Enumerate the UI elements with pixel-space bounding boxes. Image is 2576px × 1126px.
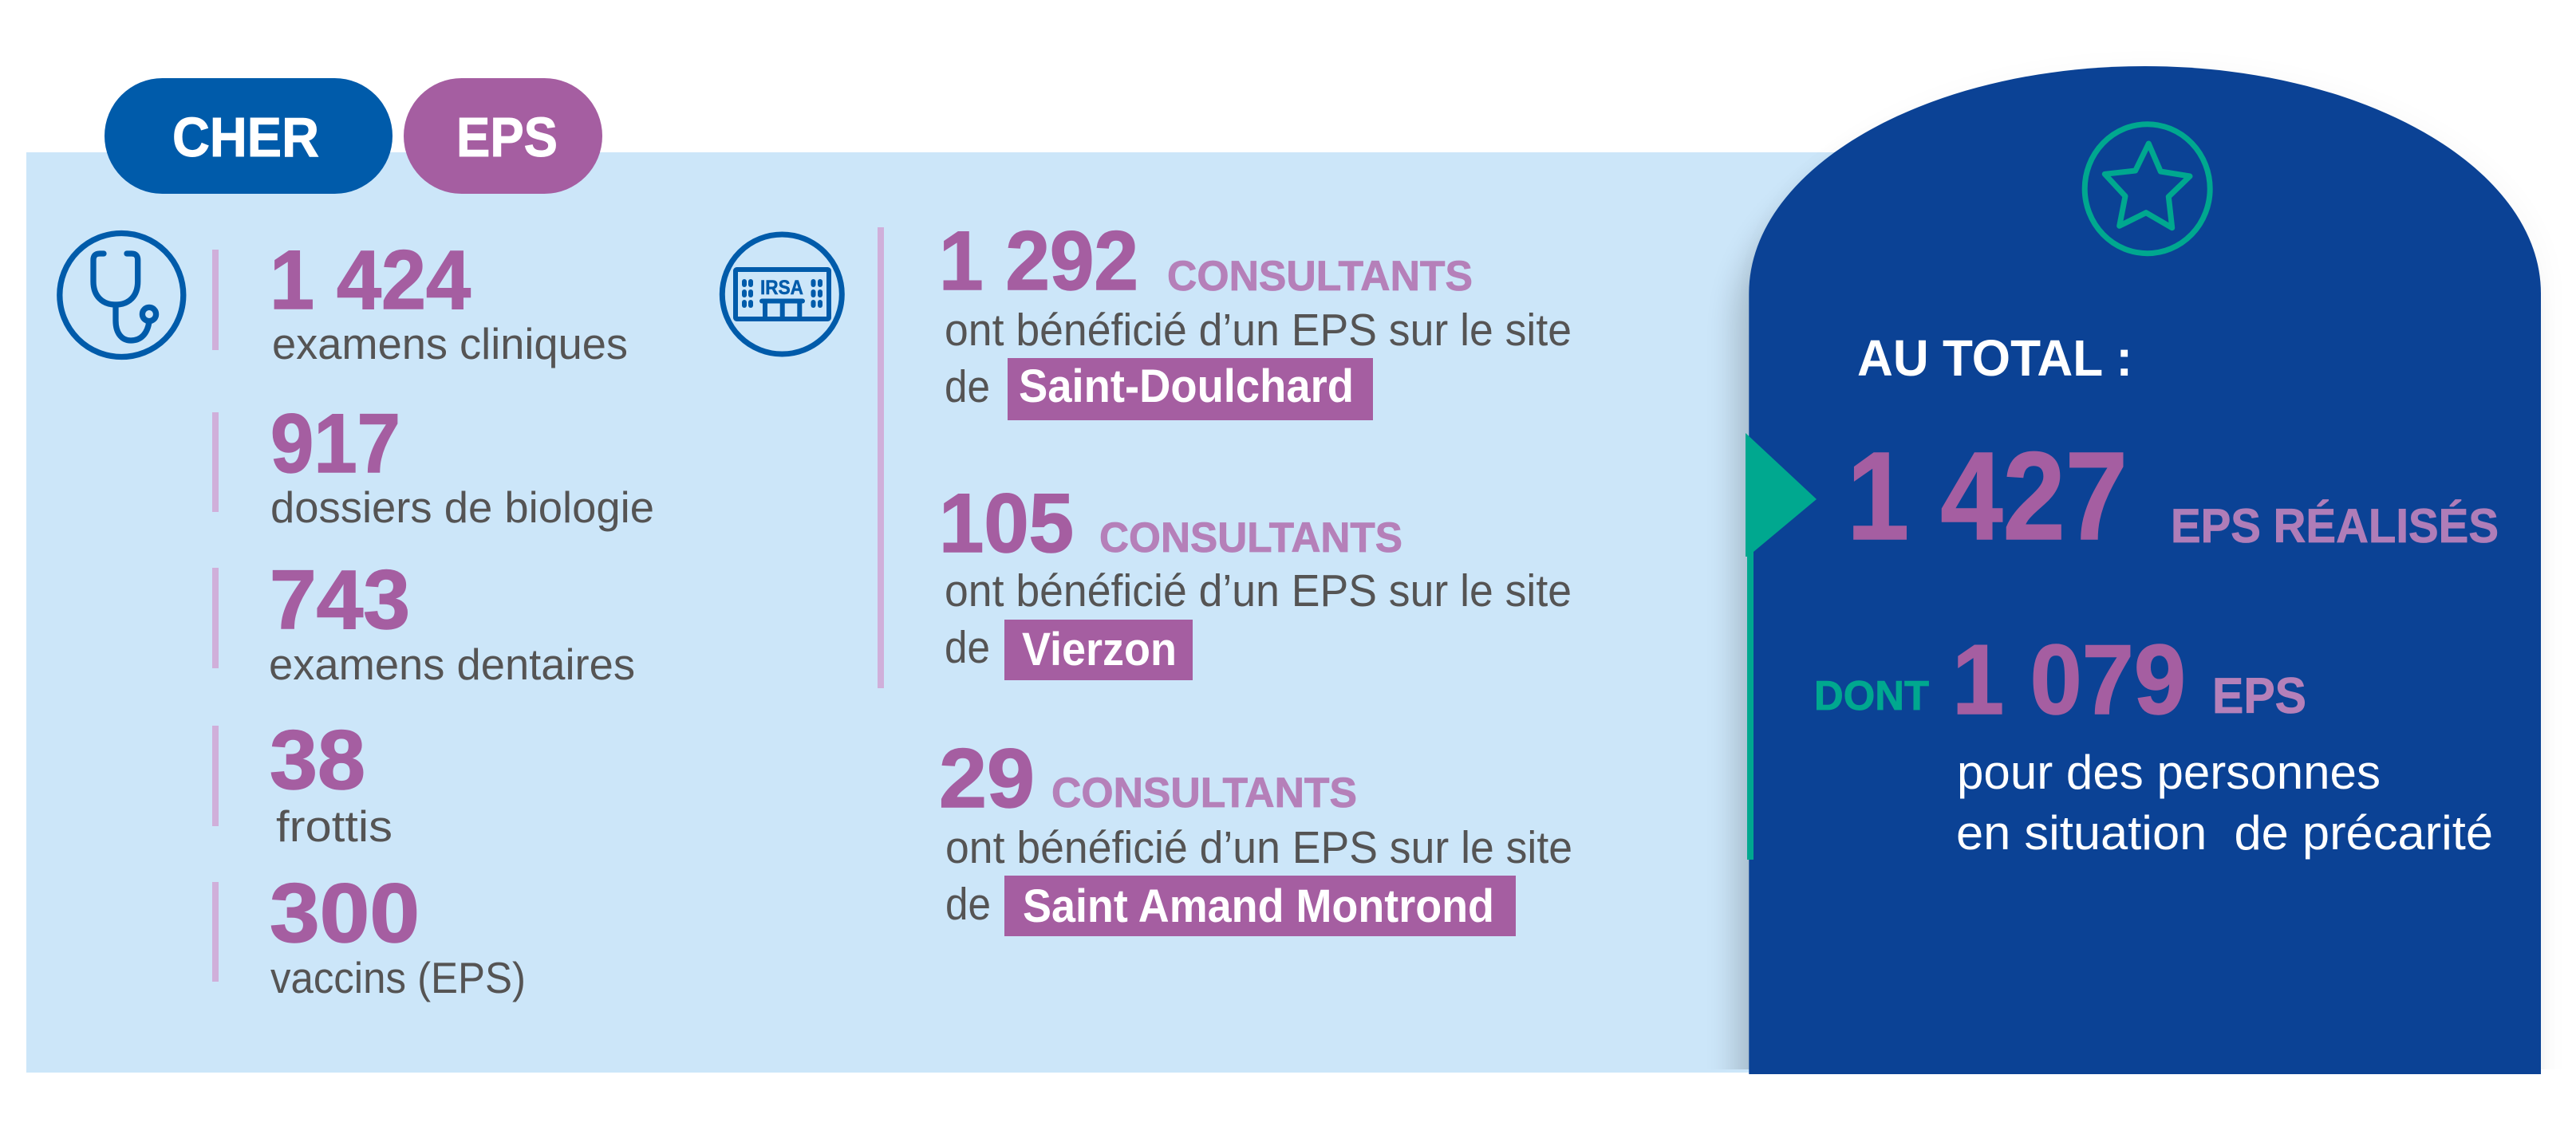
pill: EPS: [404, 78, 602, 194]
divider: sites: [878, 227, 884, 688]
stat: EPS réalisés: EPS RÉALISÉS: [2171, 499, 2499, 553]
stat: examens dentaires: examens dentaires: [269, 640, 635, 689]
panel shadow: [1723, 187, 2543, 1069]
pill: CHER: [105, 78, 393, 194]
pill: EPS: EPS: [456, 106, 558, 168]
site: Saint Amand Montrond: Saint Amand Montrond: [1023, 880, 1494, 932]
panel: light blue background: [26, 152, 1941, 1073]
site: Saint Amand Montrond: CONSULTANTS: [1051, 770, 1357, 817]
site: Saint-Doulchard: de: [945, 361, 990, 412]
column: medical exams: [212, 234, 654, 1002]
text: situation de précarité: pour des personnes: [1957, 746, 2381, 799]
stat: frottis: [212, 714, 393, 851]
site: Vierzon: [939, 477, 1572, 680]
pill: CHER: CHER: [172, 106, 319, 168]
stat: dont 1079 EPS: EPS: [2212, 668, 2306, 724]
icon: star: [2085, 124, 2210, 254]
stat: examens cliniques: examens cliniques: [272, 319, 628, 368]
site: Saint Amand Montrond: 29: [939, 732, 1035, 825]
site: Vierzon: ont bénéficié d’un EPS sur le site: [945, 565, 1572, 616]
text: situation de précarité: en situation de précarité: [1956, 806, 2493, 860]
stat: examens dentaires: [212, 553, 635, 689]
site: Saint Amand Montrond: [939, 732, 1572, 936]
site: Vierzon: CONSULTANTS: [1099, 514, 1402, 561]
icon: IRSA building: IRSA: [760, 277, 803, 299]
panel: total: [1746, 66, 2541, 1074]
site: Saint-Doulchard: Saint-Doulchard: [1019, 360, 1354, 412]
stat: vaccins: [212, 867, 526, 1002]
stat: frottis: frottis: [276, 801, 393, 851]
stat: dont 1079 EPS: [1814, 625, 2306, 735]
stat: dont 1079 EPS: DONT: [1814, 673, 1929, 719]
stat: dont 1079 EPS: 1 079: [1952, 625, 2186, 735]
site: Saint-Doulchard: ont bénéficié d’un EPS sur le site: [945, 305, 1572, 356]
stat: EPS réalisés: 1 427: [1847, 427, 2128, 566]
stat: EPS réalisés: [1847, 427, 2499, 566]
stat: vaccins: vaccins (EPS): [270, 953, 526, 1002]
site: Saint-Doulchard: 1 292: [939, 215, 1138, 308]
stat: dossiers de biologie: dossiers de biologie: [270, 482, 654, 532]
stat: examens cliniques: 1 424: [270, 234, 471, 327]
site: Saint-Doulchard: CONSULTANTS: [1167, 253, 1473, 300]
site: Saint-Doulchard: [939, 215, 1572, 420]
icon: IRSA building: [722, 234, 842, 354]
arrow: green marker: [1746, 433, 1817, 860]
stat: examens dentaires: 743: [270, 553, 410, 647]
text: situation de précarité: [1956, 746, 2493, 860]
stat: vaccins: 300: [270, 867, 420, 960]
stat: examens cliniques: [212, 234, 628, 368]
site: Saint Amand Montrond: ont bénéficié d’un EPS sur le site: [945, 822, 1572, 873]
site: Vierzon: 105: [939, 477, 1074, 570]
stat: frottis: 38: [270, 714, 365, 807]
site: Vierzon: Vierzon: [1022, 624, 1177, 675]
stat: dossiers de biologie: [212, 397, 654, 532]
site: Saint Amand Montrond: de: [945, 879, 991, 930]
icon: stethoscope: [60, 233, 183, 357]
stat: dossiers de biologie: 917: [270, 397, 400, 490]
heading: au total: AU TOTAL :: [1857, 329, 2132, 387]
site: Vierzon: de: [945, 622, 990, 673]
